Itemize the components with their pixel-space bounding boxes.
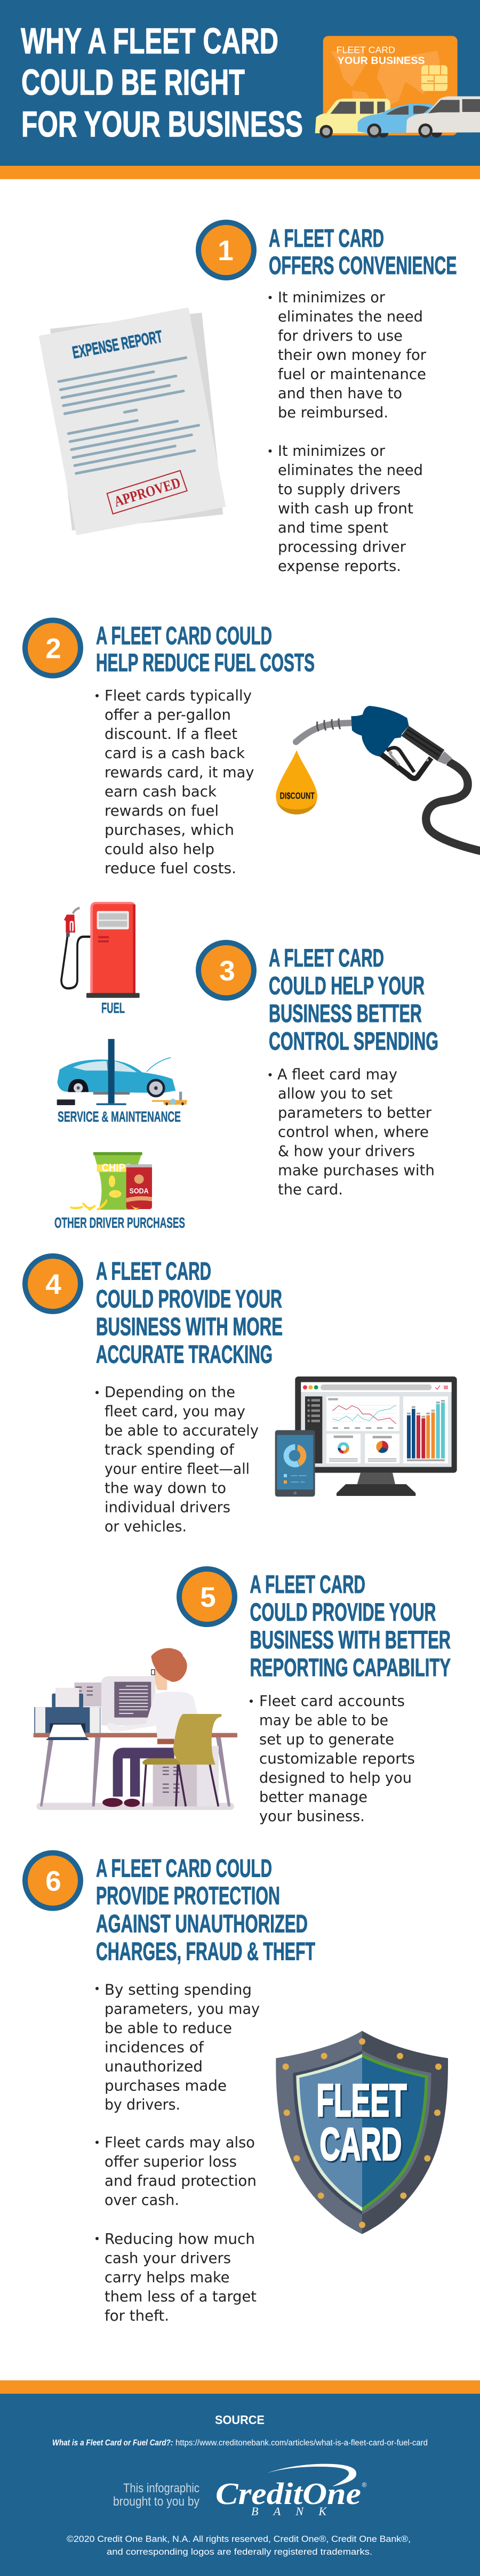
bullet text: less cash carried bbox=[95, 2231, 257, 2324]
icon: yellow car bbox=[315, 99, 390, 138]
Credit One Bank logo: ® bbox=[362, 2481, 367, 2489]
bullet text: track spending: track spending of bbox=[105, 1442, 235, 1459]
heading 6 bbox=[96, 1854, 315, 1965]
icon: fleet card shield bbox=[276, 2031, 448, 2234]
bullet text: loss and fraud protection: and fraud protection bbox=[105, 2172, 257, 2189]
bullet text: set parameters: parameters to better bbox=[278, 1105, 432, 1122]
icon: fuel nozzle with discount drop bbox=[276, 706, 480, 851]
icon: expense report document bbox=[39, 308, 226, 535]
icon: white car bbox=[406, 96, 480, 138]
number badge 2 bbox=[25, 621, 81, 676]
printer bbox=[34, 1688, 100, 1740]
copyright bbox=[67, 2534, 411, 2557]
bullet text: customizable reports: better manage bbox=[259, 1789, 367, 1806]
footer bbox=[0, 2380, 480, 2576]
bullet text: spending parameters bbox=[95, 1981, 260, 2113]
bullet text: track spending: be able to accurately bbox=[105, 1422, 259, 1439]
panel: section 4 accurate tracking bbox=[25, 1256, 457, 1535]
Credit One Bank logo: BANK bbox=[251, 2505, 327, 2518]
bullet text: track spending: the way down to bbox=[105, 1480, 226, 1497]
bullet text: set parameters: allow you to set bbox=[278, 1085, 393, 1102]
sponsor text: brought to you by bbox=[113, 2494, 199, 2509]
bullet text: drivers own money: their own money for bbox=[278, 347, 427, 364]
icon: orange fleet card: FLEET CARD bbox=[337, 44, 395, 55]
bullet text: per-gallon discount: rewards on fuel bbox=[105, 802, 219, 819]
number badge 1 bbox=[198, 222, 254, 278]
icon: fleet card with cars bbox=[315, 36, 480, 138]
bullet text: customizable reports: designed to help you bbox=[259, 1769, 412, 1786]
icon: chips and soda: SODA bbox=[130, 1187, 149, 1195]
heading 1 bbox=[269, 224, 457, 279]
bullet text: set parameters: the card. bbox=[278, 1181, 343, 1198]
bullet text: spending parameters: By setting spending bbox=[105, 1981, 252, 1998]
bullet text: loss and fraud protection: over cash. bbox=[105, 2192, 179, 2209]
icon: car on service lift bbox=[57, 1039, 187, 1105]
bullet text: less cash carried: them less of a target bbox=[105, 2288, 257, 2305]
icon: blue car bbox=[358, 103, 434, 138]
heading 1: A FLEET CARD bbox=[269, 224, 384, 252]
bullet text: cash up front: with cash up front bbox=[278, 500, 413, 517]
bullet text: track spending: or vehicles. bbox=[105, 1518, 187, 1535]
bullet text: set parameters: make purchases with bbox=[278, 1162, 435, 1179]
icon: orange fleet card bbox=[323, 36, 458, 135]
bullet text: track spending: your entire fleet—all bbox=[105, 1461, 250, 1478]
bullet text: spending parameters: unauthorized bbox=[105, 2058, 203, 2075]
bullet text: loss and fraud protection bbox=[95, 2134, 257, 2209]
chair bbox=[142, 1714, 222, 1806]
label: fuel: FUEL bbox=[101, 1000, 125, 1016]
label: other driver purchases: OTHER DRIVER PURCHASES bbox=[54, 1214, 185, 1231]
number badge 5 bbox=[179, 1569, 235, 1624]
bullet text: per-gallon discount: Fleet cards typically bbox=[105, 687, 252, 704]
heading 4: A FLEET CARD bbox=[96, 1257, 211, 1285]
heading 5: A FLEET CARD bbox=[250, 1570, 365, 1598]
title: FOR YOUR BUSINESS bbox=[21, 104, 303, 144]
sponsor text: This infographic bbox=[123, 2481, 199, 2495]
number badge 4 bbox=[25, 1256, 81, 1311]
bullet text: less cash carried: cash your drivers bbox=[105, 2250, 231, 2267]
bullet text: per-gallon discount: reduce fuel costs. bbox=[105, 860, 236, 877]
icon: fleet card shield: FLEET bbox=[318, 2076, 408, 2128]
bullet text: per-gallon discount: earn cash back bbox=[105, 783, 217, 800]
bullet text: set parameters bbox=[269, 1066, 435, 1198]
bullet text: drivers own money: and then have to bbox=[278, 385, 402, 402]
bullet text: loss and fraud protection: Fleet cards may also bbox=[105, 2134, 255, 2151]
icon: chips and soda: CHIPS bbox=[102, 1162, 132, 1174]
bullet text: customizable reports: customizable reports bbox=[259, 1750, 415, 1767]
bullet text: cash up front bbox=[269, 442, 423, 575]
discount drop: DI$COUNT bbox=[280, 790, 315, 801]
bullet text: cash up front: It minimizes or bbox=[278, 442, 386, 460]
icon: expense report document: APPROVED bbox=[112, 474, 182, 510]
bullet text: set parameters: & how your drivers bbox=[278, 1143, 415, 1160]
panel: section 5 reporting capability bbox=[34, 1569, 451, 1825]
title bbox=[21, 21, 303, 144]
bullet text: drivers own money: fuel or maintenance bbox=[278, 366, 426, 383]
bullet text: spending parameters: be able to reduce bbox=[105, 2019, 232, 2036]
bullet text: drivers own money: be reimbursed. bbox=[278, 404, 388, 421]
heading 6: PROVIDE PROTECTION bbox=[96, 1881, 280, 1910]
heading 2: A FLEET CARD COULD bbox=[96, 622, 272, 649]
bullet text: less cash carried: Reducing how much bbox=[105, 2231, 255, 2248]
bullet text: track spending: Depending on the bbox=[105, 1384, 235, 1401]
copyright: and corresponding logos are federally registered trademarks. bbox=[107, 2547, 372, 2557]
bullet text: spending parameters: incidences of bbox=[105, 2039, 204, 2056]
bullet text: drivers own money: eliminates the need bbox=[278, 308, 423, 325]
number badge 3: 3 bbox=[219, 955, 235, 987]
bullet text: per-gallon discount: card is a cash back bbox=[105, 745, 245, 762]
number badge 1: 1 bbox=[218, 235, 234, 267]
icon: monitor and tablet dashboard bbox=[275, 1376, 457, 1496]
bullet text: drivers own money: for drivers to use bbox=[278, 327, 403, 344]
bullet text: cash up front: processing driver bbox=[278, 538, 406, 556]
source citation bbox=[52, 2438, 428, 2448]
heading 4: COULD PROVIDE YOUR bbox=[96, 1285, 282, 1313]
bullet text: spending parameters: by drivers. bbox=[105, 2096, 180, 2113]
number badge 5: 5 bbox=[200, 1582, 216, 1613]
bullet text: customizable reports: may be able to be bbox=[259, 1712, 388, 1729]
tablet bbox=[275, 1430, 315, 1496]
bullet text: customizable reports: your business. bbox=[259, 1808, 365, 1825]
heading 2 bbox=[96, 622, 315, 677]
person bbox=[102, 1648, 197, 1807]
title: WHY A FLEET CARD bbox=[21, 21, 278, 61]
icon: fuel pump bbox=[61, 902, 140, 998]
bullet text: cash up front: and time spent bbox=[278, 519, 388, 536]
bullet text: loss and fraud protection: offer superior loss bbox=[105, 2153, 237, 2170]
source heading: SOURCE bbox=[215, 2413, 265, 2427]
heading 6: A FLEET CARD COULD bbox=[96, 1854, 272, 1882]
heading 2: HELP REDUCE FUEL COSTS bbox=[96, 648, 315, 677]
icon: orange fleet card: YOUR BUSINESS bbox=[338, 55, 425, 67]
heading 3 bbox=[269, 944, 438, 1055]
heading 5 bbox=[250, 1570, 451, 1681]
panel: section 2 fuel costs bbox=[25, 621, 480, 877]
bullet text: drivers own money: It minimizes or bbox=[278, 289, 386, 306]
line chart bbox=[326, 1396, 399, 1431]
donut chart bbox=[326, 1434, 361, 1463]
icon: expense report document: EXPENSE REPORT bbox=[71, 327, 164, 362]
bullet text: per-gallon discount: purchases, which bbox=[105, 822, 234, 839]
icon: fleet card shield: FLEET bbox=[316, 2075, 407, 2126]
bar chart bbox=[403, 1396, 448, 1463]
bullet text: customizable reports: Fleet card accounts bbox=[259, 1693, 405, 1710]
number badge 6 bbox=[25, 1853, 81, 1909]
number badge 3 bbox=[198, 943, 254, 998]
label: service and maintenance: SERVICE & MAINTENANCE bbox=[58, 1108, 181, 1125]
sponsor text bbox=[113, 2481, 199, 2509]
bullet text: cash up front: expense reports. bbox=[278, 558, 401, 575]
bullet text: cash up front: to supply drivers bbox=[278, 481, 401, 498]
bullet text: set parameters: A fleet card may bbox=[277, 1066, 397, 1083]
bullet text: customizable reports bbox=[250, 1693, 415, 1825]
number badge 2: 2 bbox=[45, 633, 61, 664]
panel: section 6 protection bbox=[25, 1853, 448, 2324]
panel: section 3 control spending bbox=[54, 902, 438, 1231]
icon: chips and soda bbox=[70, 1152, 152, 1210]
bullet text: track spending: individual drivers bbox=[105, 1499, 230, 1516]
copyright: ©2020 Credit One Bank, N.A. All rights reserved, Credit One®, Credit One Bank®, bbox=[67, 2534, 411, 2544]
heading 6: AGAINST UNAUTHORIZED bbox=[96, 1910, 308, 1937]
bullet text: per-gallon discount: discount. If a fleet bbox=[105, 726, 237, 743]
bullet text: spending parameters: purchases made bbox=[105, 2077, 227, 2094]
bullet text: drivers own money bbox=[269, 289, 427, 421]
bullet text: track spending: fleet card, you may bbox=[105, 1403, 245, 1420]
bullet text: per-gallon discount bbox=[95, 687, 254, 877]
panel: section 1 convenience bbox=[39, 222, 457, 575]
bullet text: per-gallon discount: could also help bbox=[105, 841, 214, 858]
heading 4: BUSINESS WITH MORE bbox=[96, 1313, 283, 1340]
icon: fleet card shield: CARD bbox=[321, 2120, 403, 2171]
source citation: https://www.creditonebank.com/articles/what-is-a-fleet-card-or-fuel-card bbox=[175, 2438, 428, 2448]
discount drop bbox=[276, 750, 317, 815]
bullet text: per-gallon discount: offer a per-gallon bbox=[105, 706, 231, 723]
header banner bbox=[0, 0, 480, 179]
icon: person at desk with printer bbox=[34, 1648, 237, 1810]
Credit One Bank logo bbox=[215, 2464, 367, 2518]
bullet text: customizable reports: set up to generate bbox=[259, 1731, 394, 1748]
heading 4 bbox=[96, 1257, 283, 1368]
heading 4: ACCURATE TRACKING bbox=[96, 1340, 273, 1368]
title: COULD BE RIGHT bbox=[21, 62, 245, 102]
Credit One Bank logo: CreditOne bbox=[215, 2476, 361, 2511]
number badge 6: 6 bbox=[45, 1866, 61, 1897]
bullet text: spending parameters: parameters, you may bbox=[105, 2000, 260, 2017]
bullet text: less cash carried: for theft. bbox=[105, 2307, 169, 2324]
heading 3: A FLEET CARD bbox=[269, 944, 384, 972]
bullet text: set parameters: control when, where bbox=[278, 1124, 429, 1141]
bullet text: track spending bbox=[95, 1384, 259, 1535]
icon: fleet card shield: CARD bbox=[319, 2119, 402, 2170]
heading 6: CHARGES, FRAUD & THEFT bbox=[96, 1937, 315, 1965]
bullet text: less cash carried: carry helps make bbox=[105, 2269, 229, 2286]
bullet text: cash up front: eliminates the need bbox=[278, 462, 423, 479]
number badge 4: 4 bbox=[45, 1269, 61, 1300]
source citation: What is a Fleet Card or Fuel Card?: bbox=[52, 2438, 173, 2448]
pie chart bbox=[365, 1434, 399, 1463]
bullet text: per-gallon discount: rewards card, it may bbox=[105, 764, 254, 781]
